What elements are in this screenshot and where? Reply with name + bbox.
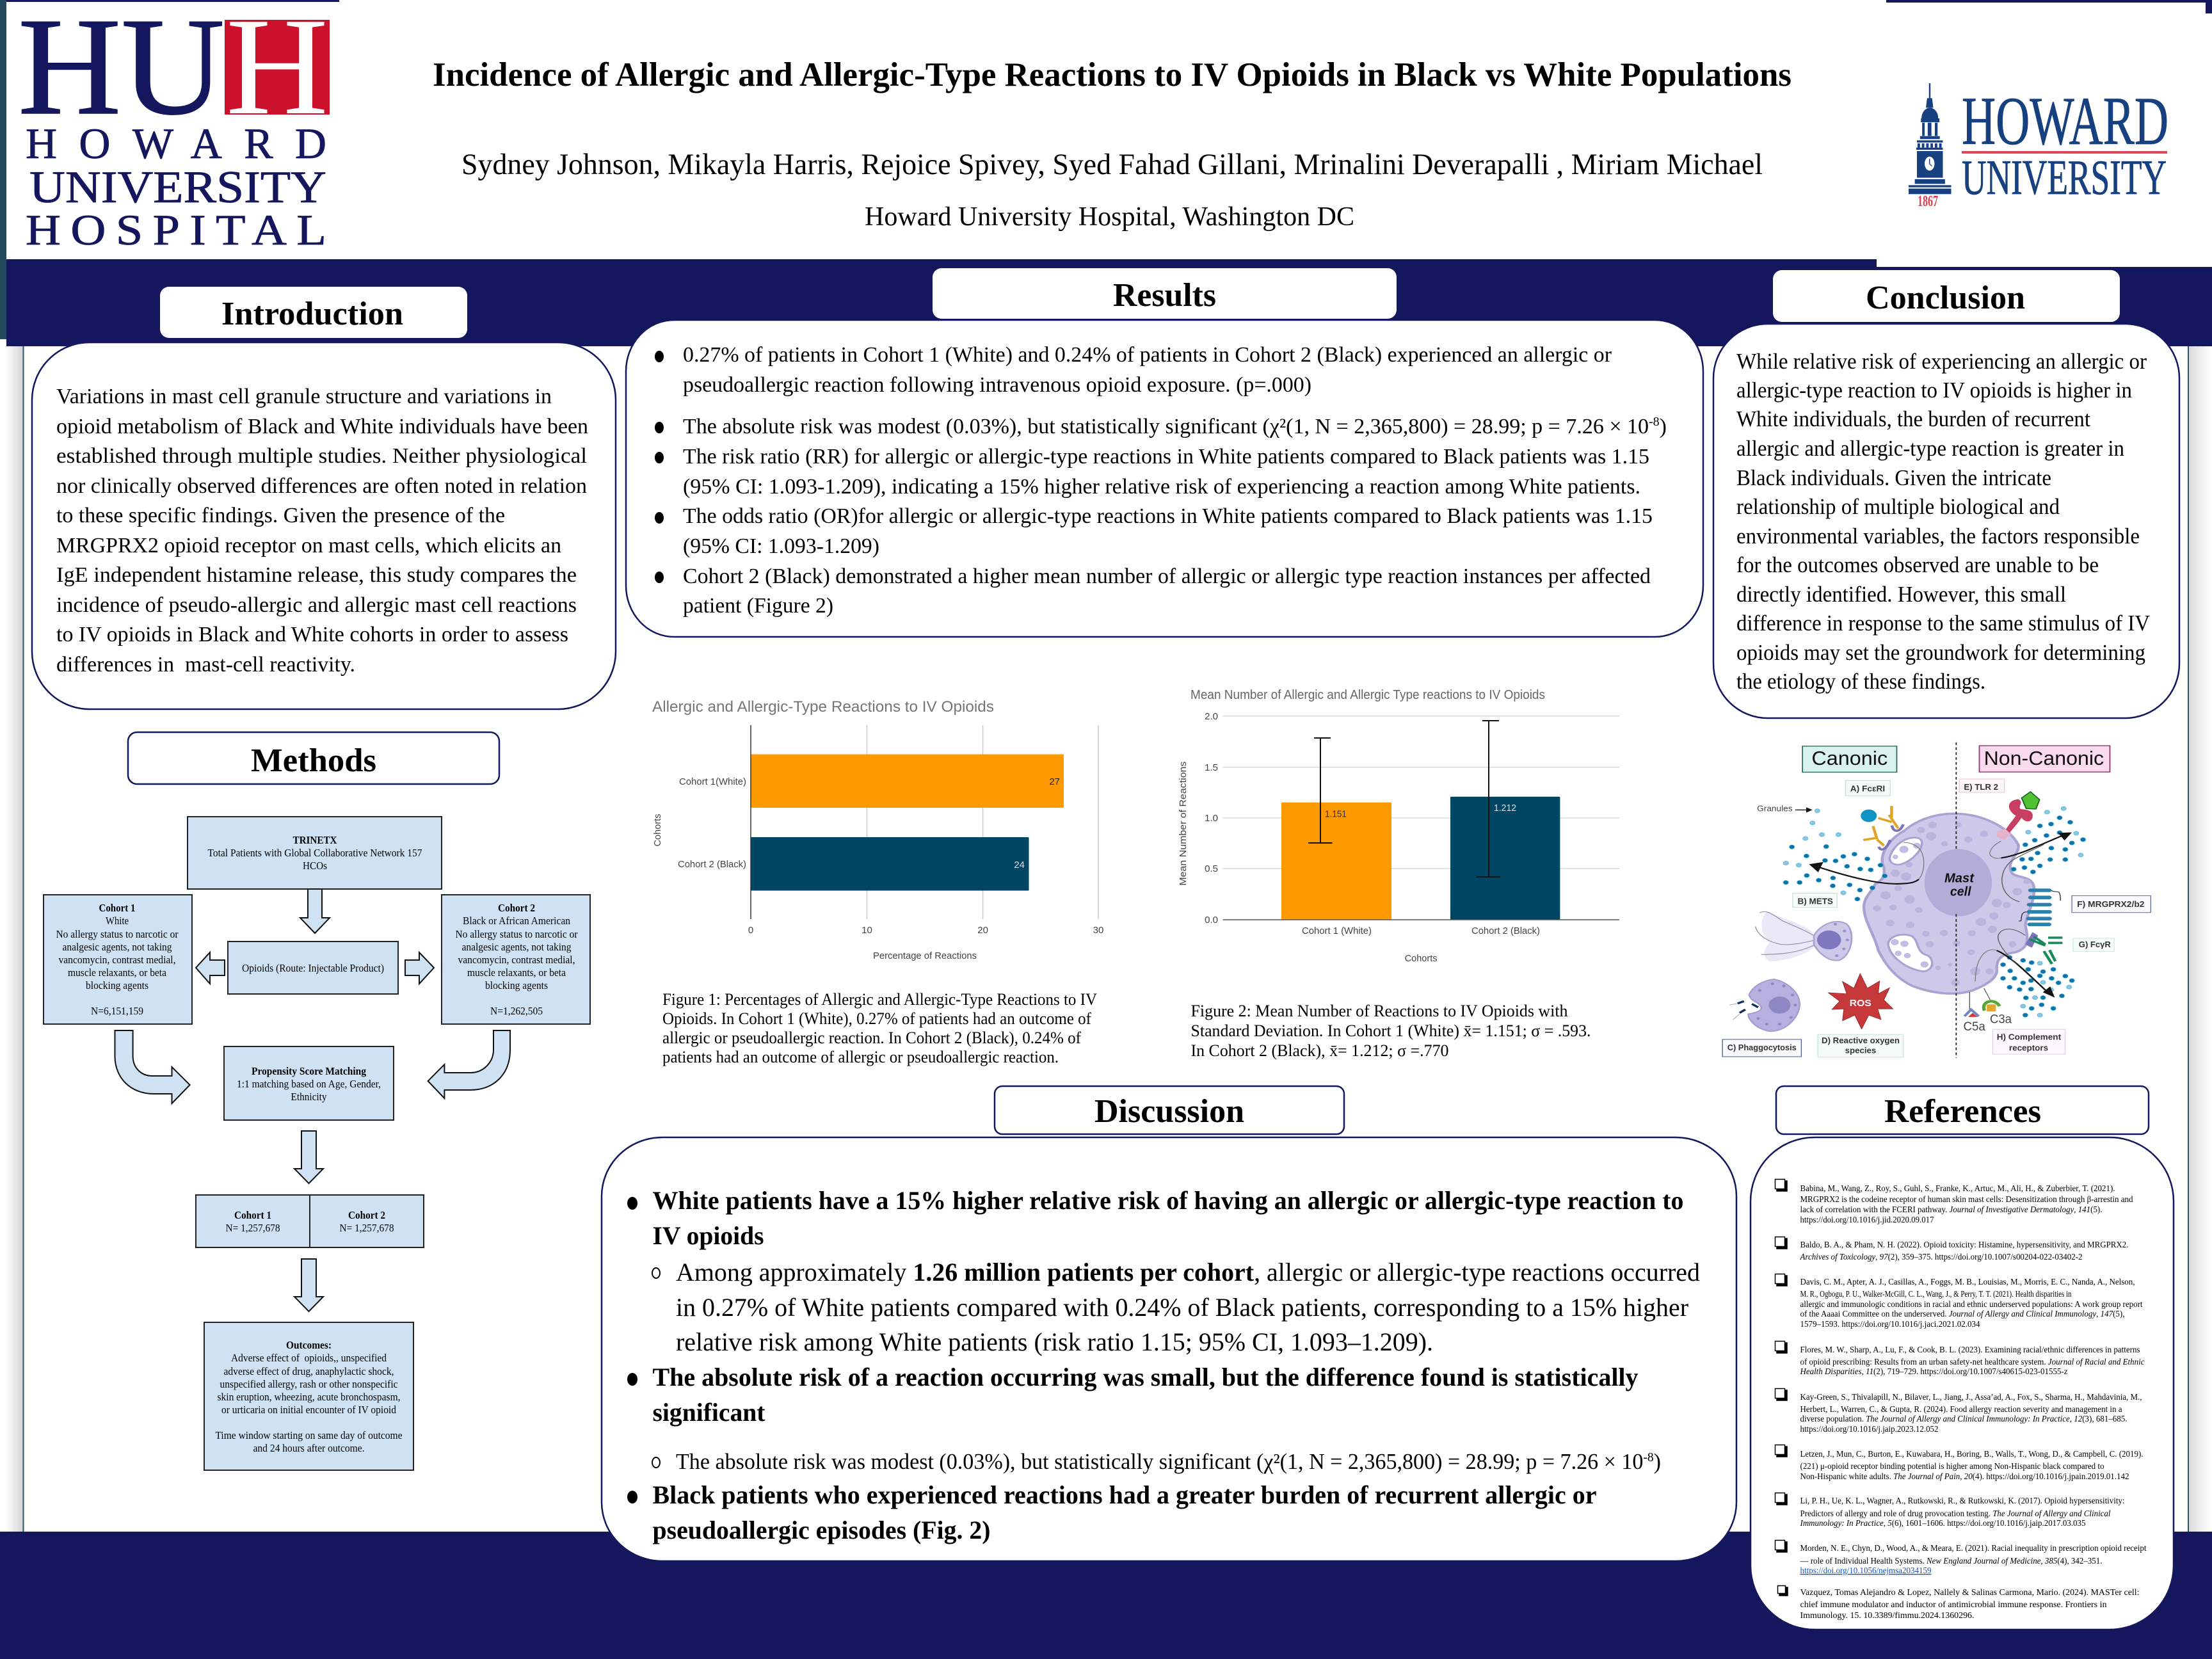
- bar chart: figure 1: 10: [862, 925, 872, 936]
- bar chart: figure 2: 1.0: [1205, 813, 1218, 824]
- text block: introduction: [56, 385, 588, 677]
- label: canonic: Canonic: [1811, 748, 1887, 769]
- text block: results bullets: pseudoallergic reaction following intravenous opioid exposure. (p=.000): [683, 373, 1311, 397]
- logo: Howard University: 1867: [1918, 193, 1938, 210]
- text block: discussion bullets: The absolute risk of a reaction occurring was small, but the difference found is statistically: [653, 1363, 1639, 1391]
- text block: conclusion: allergic and allergic-type reaction is greater in: [1736, 436, 2124, 461]
- label: B METS: [1793, 894, 1837, 908]
- arrow: down to outcomes: [294, 1259, 323, 1311]
- text block: results bullets: Cohort 2 (Black) demonstrated a higher mean number of allergic or allergic type reaction instances per affected: [683, 565, 1651, 588]
- caption: figure 2: Standard Deviation. In Cohort 1 (White) x̄= 1.151; σ = .593.: [1190, 1022, 1591, 1040]
- text block: references: MRGPRX2 is the codeine receptor of human skin mast cells: Desensitization through β-arrestin and: [1800, 1194, 2133, 1204]
- receptors: complement: C3a: [1990, 1012, 2012, 1026]
- bar chart: figure 2: [1178, 688, 1619, 964]
- reference checkboxes: [1775, 1179, 1788, 1596]
- label: granules: Granules: [1757, 805, 1793, 813]
- icon: reactive oxygen species burst: ROS: [1850, 998, 1871, 1009]
- text block: results bullets: The odds ratio (OR)for allergic or allergic-type reactions in White patients compared to Black patients was 1.15: [683, 504, 1653, 528]
- flow box: cohort 2: [442, 895, 590, 1024]
- caption: figure 1: allergic or pseudoallergic reaction. In Cohort 2 (Black), 0.24% of: [662, 1029, 1081, 1047]
- flow box: TriNetX: [188, 817, 442, 889]
- label: B METS: B) METS: [1798, 897, 1833, 906]
- flow box: cohort 2: No allergy status to narcotic or: [456, 928, 578, 940]
- caption: figure 2: Figure 2: Mean Number of Reactions to IV Opioids with: [1190, 1002, 1568, 1020]
- mast cell body: Mast: [1944, 870, 1975, 885]
- label: A FceRI: A) FcεRI: [1850, 785, 1885, 794]
- bar chart: figure 1: Allergic and Allergic-Type Reactions to IV Opioids: [652, 698, 994, 716]
- label: non-canonic: Non-Canonic: [1984, 748, 2104, 769]
- text block: references: chief immune modulator and inductor of antimicrobial immune response. Frontiers in: [1800, 1599, 2107, 1609]
- text block: introduction: to IV opioids in Black and White cohorts in order to assess: [56, 623, 568, 646]
- label: E TLR 2: [1959, 779, 2005, 792]
- receptor: TLR 2: [1997, 792, 2040, 840]
- label: D reactive oxygen species: species: [1845, 1046, 1876, 1055]
- text block: references: https://doi.org/10.1016/j.jid.2020.09.017: [1800, 1215, 1934, 1224]
- flow box: cohort 2: Black or African American: [463, 915, 570, 927]
- authors: Sydney Johnson, Mikayla Harris, Rejoice Spivey, Syed Fahad Gillani, Mrinalini Deverapalli , Miriam Michael: [461, 148, 1763, 181]
- flow box: cohort 2: blocking agents: [485, 979, 548, 991]
- bar chart: figure 1: 27: [1049, 776, 1060, 787]
- text block: conclusion: the etiology of these findings.: [1736, 669, 1985, 694]
- text block: references: https://doi.org/10.1016/j.jaip.2023.12.052: [1800, 1424, 1938, 1434]
- text block: introduction: to these specific findings. Given the presence of the: [56, 504, 505, 527]
- heading: conclusion: Conclusion: [1866, 280, 2025, 316]
- label: H complement receptors: receptors: [2009, 1044, 2048, 1053]
- label: E TLR 2: E) TLR 2: [1964, 783, 1998, 792]
- label: D reactive oxygen species: D) Reactive oxygen: [1822, 1036, 1900, 1045]
- heading: introduction: [160, 287, 467, 338]
- flow box: outcomes: or urticaria on initial encounter of IV opioid: [221, 1404, 396, 1416]
- flow box: cohort 2: N=1,262,505: [490, 1005, 543, 1017]
- arrow: right to cohort 2: [405, 952, 434, 984]
- text block: references: https://doi.org/10.1056/nejmsa2034159: [1800, 1566, 1932, 1575]
- flow box: matched cohorts: Cohort 2: [348, 1209, 385, 1221]
- text block: references: Letzen, J., Mun, C., Burton, E., Kuwabara, H., Boring, B., Walls, T., Wong, D., & Campbell, C. (2019).: [1800, 1449, 2143, 1459]
- logo: Howard University Hospital: UNIVERSITY: [29, 163, 326, 212]
- arrow: left to cohort 1: [196, 952, 225, 984]
- text block: discussion bullets: IV opioids: [653, 1221, 764, 1250]
- text block: discussion bullets: pseudoallergic episodes (Fig. 2): [653, 1516, 991, 1544]
- text block: results bullets: The absolute risk was modest (0.03%), but statistically significant (χ²(1, N = 2,365,800) = 28.99; p = 7.26 × 10: [683, 415, 1649, 438]
- title: Incidence of Allergic and Allergic-Type Reactions to IV Opioids in Black vs White Populations: [433, 56, 1791, 93]
- bar chart: figure 2: 1.5: [1205, 762, 1218, 773]
- text block: results bullets: ): [1660, 415, 1667, 438]
- text block: references: Kay-Green, S., Thivalapill, N., Bilaver, L., Jiang, J., Assa’ad, A., Fox, S., Sharma, H., Mahdavinia, M.,: [1800, 1392, 2142, 1402]
- text block: conclusion: directly identified. However, this small: [1736, 582, 2066, 607]
- flow box: cohort 2: analgesic agents, not taking: [462, 941, 572, 953]
- heading: introduction: Introduction: [221, 296, 403, 332]
- bar chart: figure 1: Percentage of Reactions: [873, 950, 977, 961]
- text block: introduction: nor clinically observed differences are often noted in relation: [56, 474, 587, 498]
- caption: figure 1: Opioids. In Cohort 1 (White), 0.27% of patients had an outcome of: [662, 1009, 1091, 1028]
- flow box: outcomes: [204, 1322, 413, 1470]
- flow box: cohort 1: vancomycin, contrast medial,: [59, 954, 175, 966]
- flow box: opioids: [228, 942, 398, 994]
- text block: discussion bullets: Among approximately 1.26 million patients per cohort, allergic or allergic-type reactions occurred: [676, 1258, 1700, 1286]
- bar chart: figure 1: 24: [1014, 860, 1025, 870]
- bar chart: figure 2: 0.5: [1205, 863, 1218, 874]
- logo: Howard University Hospital: [18, 0, 330, 254]
- label: A FceRI: [1846, 780, 1890, 796]
- receptor: Fc gamma R: [2025, 932, 2062, 964]
- heading: conclusion: [1773, 270, 2120, 322]
- text block: introduction: MRGPRX2 opioid receptor on mast cells, which elicits an: [56, 534, 561, 557]
- arrow: down to matched cohorts: [294, 1131, 323, 1183]
- text block: references: lack of correlation with the FCERI pathway. Journal of Investigative Dermatology, 141(5).: [1800, 1205, 2102, 1214]
- text block: references: diverse population. The Journal of Allergy and Clinical Immunology: In Practice, 12(3), 681–685.: [1800, 1414, 2128, 1423]
- text block: introduction: IgE independent histamine release, this study compares the: [56, 563, 577, 587]
- logo: Howard University Hospital: HOWARD: [26, 119, 326, 168]
- text block: conclusion: White individuals, the burden of recurrent: [1736, 406, 2090, 431]
- text block: references: Li, P. H., Ue, K. L., Wagner, A., Rutkowski, R., & Rutkowski, K. (2017). Opioid hypersensitivity:: [1800, 1496, 2125, 1505]
- label: F MRGPRX2: F) MRGPRX2/b2: [2077, 900, 2144, 909]
- arrow: cohort 2 to matching: [428, 1030, 510, 1098]
- label: H complement receptors: [1992, 1029, 2065, 1054]
- heading: results: Results: [1113, 277, 1216, 314]
- text block: conclusion: Black individuals. Given the intricate: [1736, 465, 2051, 490]
- bar chart: figure 1: Cohorts: [652, 814, 663, 846]
- text block: references: 1579–1593. https://doi.org/10.1016/j.jaci.2021.02.034: [1800, 1319, 1980, 1329]
- flow box: outcomes: Adverse effect of opioids,, unspecified: [231, 1352, 387, 1364]
- text block: references: Archives of Toxicology, 97(2), 359–375. https://doi.org/10.1007/s00204-022-03402-2: [1800, 1252, 2083, 1262]
- flow box: cohort 1: muscle relaxants, or beta: [68, 966, 166, 979]
- flow box: propensity score matching: 1:1 matching based on Age, Gender,: [237, 1078, 381, 1090]
- flow box: cohort 1: N=6,151,159: [91, 1005, 143, 1017]
- text block: references: Babina, M., Wang, Z., Roy, S., Guhl, S., Franke, K., Artuc, M., Ali, H., & Zuberbier, T. (2021).: [1800, 1183, 2115, 1193]
- text block: conclusion: [1736, 349, 2150, 694]
- divider: canonic vs non-canonic: [1955, 742, 1957, 1058]
- panel: introduction: [32, 287, 616, 709]
- bar chart: figure 2: Mean Number of Allergic and Allergic Type reactions to IV Opioids: [1190, 688, 1545, 702]
- text block: references: of the Aaaai Committee on the underserved. Journal of Allergy and Clinical Immunology, 147(5),: [1800, 1309, 2125, 1318]
- logo: Howard University Hospital: HOSPITAL: [26, 206, 326, 254]
- flow box: cohort 1: Cohort 1: [99, 902, 136, 914]
- flow box: TriNetX: Total Patients with Global Collaborative Network 157: [207, 847, 422, 859]
- cell: phagocyte: [1729, 979, 1800, 1031]
- bar chart: figure 1: 20: [977, 925, 988, 936]
- text block: references: Davis, C. M., Apter, A. J., Casillas, A., Foggs, M. B., Louisias, M., Morris, E. C., Nanda, A., Nelson,: [1800, 1277, 2135, 1286]
- flowchart: methods: [44, 817, 590, 1470]
- flow box: matched cohorts: [196, 1195, 424, 1247]
- text block: references: of opioid prescribing: Results from an urban safety-net healthcare system. Journal of Racial and Ethnic: [1800, 1357, 2145, 1366]
- text block: results bullets: -8: [1649, 415, 1660, 429]
- text block: references: Immunology. 15. 10.3389/fimmu.2024.1360296.: [1800, 1610, 1974, 1620]
- text block: conclusion: While relative risk of experiencing an allergic or: [1736, 349, 2147, 374]
- flow box: outcomes: Time window starting on same day of outcome: [215, 1429, 402, 1441]
- flow box: TriNetX: TRINETX: [293, 834, 337, 846]
- text block: results bullets: The risk ratio (RR) for allergic or allergic-type reactions in White patients compared to Black patients was 1.15: [683, 445, 1649, 469]
- mast cell body: cell: [1950, 884, 1971, 899]
- text block: conclusion: environmental variables, the factors responsible: [1736, 524, 2140, 549]
- text block: references: [1800, 1183, 2147, 1620]
- bar chart: figure 2: Cohort 1 (White): [1302, 926, 1372, 936]
- text block: conclusion: opioids may set the groundwork for determining: [1736, 640, 2145, 665]
- panel: conclusion: [1713, 270, 2179, 718]
- text block: conclusion: relationship of multiple biological and: [1736, 494, 2060, 519]
- caption: figure 1: [662, 990, 1097, 1066]
- heading: methods: Methods: [251, 742, 376, 779]
- heading: references: References: [1884, 1093, 2041, 1130]
- text block: introduction: opioid metabolism of Black and White individuals have been: [56, 415, 588, 438]
- text block: discussion bullets: relative risk among White patients (risk ratio 1.15; 95% CI, 1.093–1.209).: [676, 1327, 1433, 1356]
- text block: references: Predictors of allergy and role of drug provocation testing. The Journal of Allergy and Clinical: [1800, 1509, 2111, 1518]
- bar chart: figure 2: 2.0: [1205, 711, 1218, 722]
- receptor: MRGPRX2: [2019, 888, 2060, 926]
- flow box: TriNetX: HCOs: [303, 860, 327, 872]
- heading: references: [1776, 1086, 2149, 1134]
- text block: results bullets: (95% CI: 1.093-1.209), indicating a 15% higher relative risk of experiencing a reaction among White patients.: [683, 475, 1640, 499]
- flow box: propensity score matching: Ethnicity: [291, 1091, 327, 1103]
- bar chart: figure 1: Cohort 1(White): [679, 776, 746, 787]
- bar chart: figure 1: 30: [1093, 925, 1103, 936]
- heading: discussion: Discussion: [1094, 1093, 1244, 1130]
- label: G FcyR: [2073, 938, 2114, 951]
- text block: introduction: differences in mast-cell reactivity.: [56, 653, 355, 677]
- text block: references: allergic and immunologic conditions in racial and ethnic underserved populations: A work group report: [1800, 1299, 2143, 1309]
- text block: discussion bullets: ): [1654, 1449, 1661, 1474]
- caption: figure 1: Figure 1: Percentages of Allergic and Allergic-Type Reactions to IV: [662, 990, 1097, 1009]
- flow box: cohort 1: analgesic agents, not taking: [63, 941, 172, 953]
- text block: introduction: established through multiple studies. Neither physiological: [56, 444, 587, 468]
- text block: references: Non-Hispanic white adults. The Journal of Pain, 20(4). https://doi.org/10.1016/j.jpain.2019.01.142: [1800, 1471, 2129, 1481]
- flow box: cohort 2: muscle relaxants, or beta: [467, 966, 566, 979]
- text block: conclusion: for the outcomes observed are unable to be: [1736, 552, 2099, 577]
- text block: references: M. R., Ogbogu, P. U., Walker-McGill, C. L., Wang, J., & Perry, T. T. (2021). Health disparities in: [1800, 1289, 2072, 1299]
- mast cell body: [1864, 813, 2034, 993]
- text block: conclusion: difference in response to the same stimulus of IV: [1736, 611, 2150, 636]
- secretion arrows: [1818, 835, 2062, 994]
- flow box: matched cohorts: Cohort 1: [234, 1209, 271, 1221]
- text block: references: Herbert, L., Warren, C., & Gupta, R. (2024). Food allergy reaction severity and management in a: [1800, 1404, 2122, 1414]
- heading: results: [933, 268, 1397, 319]
- granules: [1783, 816, 2086, 1017]
- bar chart: figure 1: Cohort 2 (Black): [678, 859, 746, 870]
- flow box: outcomes: skin eruption, wheezing, acute bronchospasm,: [218, 1391, 401, 1403]
- text block: results bullets: (95% CI: 1.093-1.209): [683, 534, 879, 558]
- flow box: outcomes: adverse effect of drug, anaphylactic shock,: [224, 1365, 394, 1377]
- label: D reactive oxygen species: [1818, 1034, 1903, 1057]
- text block: discussion bullets: [627, 1186, 1700, 1544]
- flow box: outcomes: unspecified allergy, rash or other nonspecific: [220, 1378, 398, 1390]
- caption: figure 2: [1190, 1002, 1591, 1060]
- label: F MRGPRX2: [2072, 895, 2151, 913]
- text block: references: Flores, M. W., Sharp, A., Lu, F., & Cook, B. L. (2023). Examining racial/ethnic differences in patterns: [1800, 1345, 2140, 1354]
- heading: methods: [128, 732, 499, 784]
- text block: discussion bullets: The absolute risk was modest (0.03%), but statistically significant (χ²(1, N = 2,365,800) = 28.99; p = 7.26 × 10: [676, 1449, 1670, 1474]
- flow box: cohort 1: White: [106, 915, 129, 927]
- text block: results bullets: [655, 343, 1667, 618]
- text block: references: (221) μ-opioid receptor binding potential is higher among Non-Hispanic black compared to: [1800, 1461, 2104, 1471]
- bar chart: figure 1: 0: [748, 925, 753, 936]
- panel: results: [626, 268, 1703, 637]
- flow box: matched cohorts: N= 1,257,678: [225, 1222, 280, 1234]
- arrow: cohort 1 to matching: [115, 1030, 190, 1103]
- flow box: propensity score matching: [224, 1046, 394, 1120]
- flow box: outcomes: Outcomes:: [286, 1339, 332, 1351]
- label: H complement receptors: H) Complement: [1997, 1033, 2061, 1042]
- bar chart: figure 2: 1.151: [1325, 809, 1347, 819]
- bar chart: figure 2: 0.0: [1205, 915, 1218, 926]
- label: G FcyR: G) FcγR: [2079, 941, 2111, 950]
- cell: METS release: [1755, 911, 1852, 961]
- bar chart: figure 2: 1.212: [1494, 803, 1516, 813]
- text block: references: Vazquez, Tomas Alejandro & Lopez, Nallely & Salinas Carmona, Mario. (2024). MASTer cell:: [1800, 1587, 2139, 1597]
- flow box: matched cohorts: N= 1,257,678: [339, 1222, 394, 1234]
- panel: references: [1751, 1137, 2174, 1630]
- bar chart: figure 1: [652, 698, 1103, 961]
- text block: introduction: Variations in mast cell granule structure and variations in: [56, 385, 552, 408]
- label: C phagocytosis: [1722, 1039, 1801, 1057]
- text block: references: — role of Individual Health Systems. New England Journal of Medicine, 385(4), 342–351.: [1800, 1556, 2102, 1566]
- text block: discussion bullets: -8: [1643, 1450, 1654, 1464]
- bar chart: figure 2: Mean Number of Reactions: [1178, 762, 1189, 886]
- icon: reactive oxygen species burst: [1828, 974, 1893, 1029]
- text block: discussion bullets: Black patients who experienced reactions had a greater burden of recurrent allergic or: [653, 1480, 1596, 1509]
- text block: discussion bullets: White patients have a 15% higher relative risk of having an allergic or allergic-type reaction to: [653, 1186, 1683, 1215]
- text block: results bullets: patient (Figure 2): [683, 594, 833, 618]
- text block: references: Immunology: In Practice, 5(6), 1601–1606. https://doi.org/10.1016/j.jaip.2017.03.035: [1800, 1518, 2086, 1528]
- text block: discussion bullets: in 0.27% of White patients compared with 0.24% of Black patients, corresponding to a 15% higher: [676, 1293, 1688, 1322]
- bar chart: figure 2: Cohort 2 (Black): [1471, 926, 1540, 936]
- text block: results bullets: 0.27% of patients in Cohort 1 (White) and 0.24% of patients in Cohort 2 (Black) experienced an allergic or: [683, 343, 1612, 367]
- text block: references: Health Disparities, 11(2), 719–729. https://doi.org/10.1007/s40615-023-01555-z: [1800, 1366, 2067, 1376]
- heading: discussion: [995, 1086, 1344, 1134]
- flow box: cohort 1: No allergy status to narcotic or: [56, 928, 179, 940]
- flow box: opioids: Opioids (Route: Injectable Product): [242, 962, 384, 974]
- diagram: mast cell activation pathways: [1722, 742, 2151, 1058]
- caption: figure 2: In Cohort 2 (Black), x̄= 1.212; σ =.770: [1190, 1041, 1449, 1060]
- text block: references: Morden, N. E., Chyn, D., Wood, A., & Meara, E. (2021). Racial inequality in prescription opioid receipt: [1800, 1543, 2147, 1553]
- flow box: propensity score matching: Propensity Score Matching: [252, 1065, 366, 1077]
- arrow: down to opioids: [300, 889, 330, 933]
- flow box: cohort 1: blocking agents: [86, 979, 148, 991]
- text block: discussion bullets: significant: [653, 1398, 765, 1427]
- flow box: cohort 1: [44, 895, 192, 1024]
- label: C phagocytosis: C) Phaggocytosis: [1727, 1043, 1797, 1052]
- logo: Howard University: [1909, 83, 2168, 210]
- panel: discussion: [602, 1137, 1736, 1561]
- affiliation: Howard University Hospital, Washington DC: [865, 202, 1354, 232]
- flow box: outcomes: and 24 hours after outcome.: [253, 1442, 365, 1454]
- text block: conclusion: allergic-type reaction to IV opioids is higher in: [1736, 378, 2132, 403]
- text block: introduction: incidence of pseudo-allergic and allergic mast cell reactions: [56, 593, 577, 617]
- receptors: complement: C5a: [1963, 1019, 1985, 1033]
- bar chart: figure 2: Cohorts: [1405, 953, 1438, 964]
- flow box: cohort 2: vancomycin, contrast medial,: [458, 954, 575, 966]
- caption: figure 1: patients had an outcome of allergic or pseudoallergic reaction.: [662, 1048, 1059, 1066]
- text block: references: Baldo, B. A., & Pham, N. H. (2022). Opioid toxicity: Histamine, hypersensitivity, and MRGPRX2.: [1800, 1240, 2129, 1249]
- receptor: FceRI with antibodies: [1861, 806, 1903, 849]
- receptors: complement: [1963, 988, 2012, 1033]
- flow box: cohort 2: Cohort 2: [498, 902, 535, 914]
